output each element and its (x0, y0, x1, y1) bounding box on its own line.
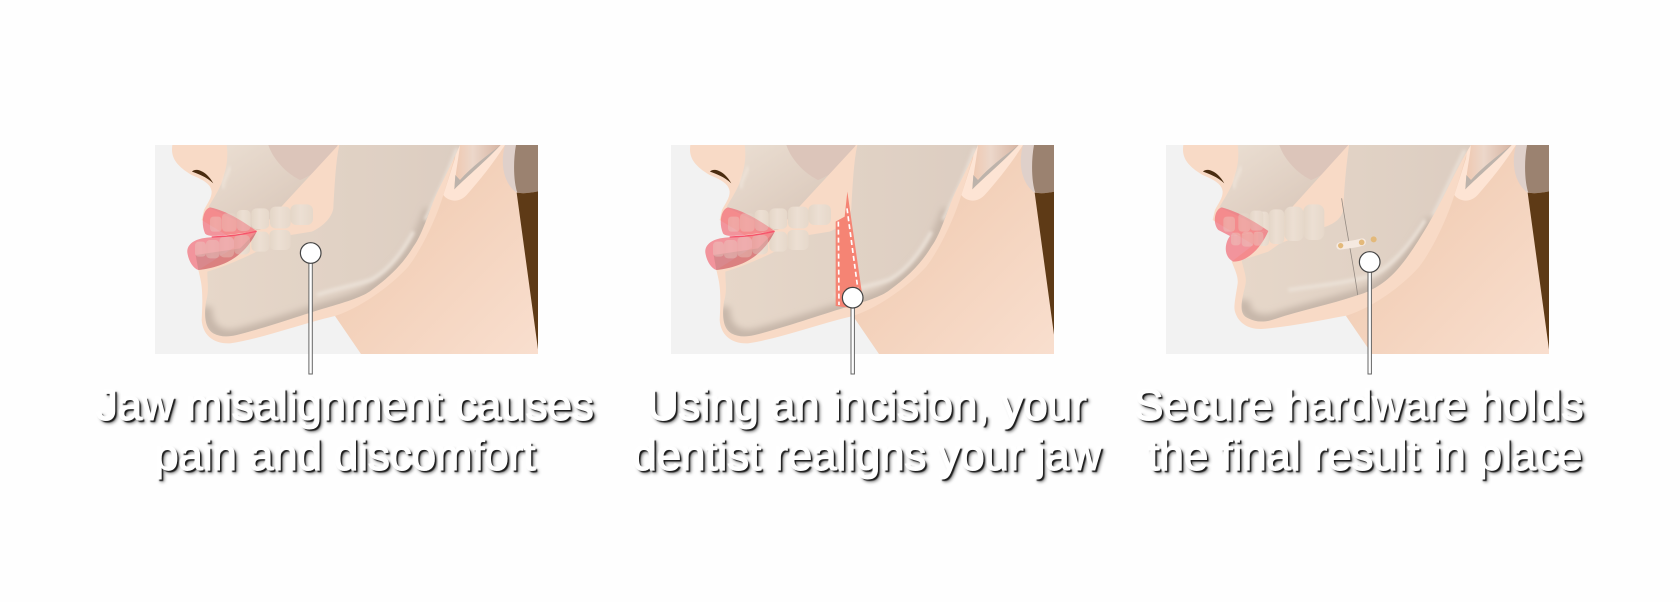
caption: jaw misalignment (96, 381, 598, 484)
caption: hardware: the final result in place (1148, 431, 1582, 480)
panel: secured hardware illustration (1166, 145, 1553, 355)
caption: hardware: Secure hardware holds (1134, 381, 1584, 430)
caption: incision (633, 381, 1106, 484)
caption: jaw misalignment: Jaw misalignment causes (96, 381, 594, 430)
caption: jaw misalignment: pain and discomfort (154, 431, 536, 480)
caption: incision: Using an incision, your (647, 381, 1087, 430)
caption: incision: dentist realigns your jaw (633, 431, 1101, 480)
caption: hardware (1134, 381, 1588, 484)
panel: jaw misalignment illustration (155, 145, 542, 355)
callout marker: incision (842, 287, 863, 374)
callout marker: misaligned jaw (300, 243, 321, 374)
callout marker: hardware (1359, 252, 1380, 374)
panel: incision illustration (671, 145, 1060, 355)
